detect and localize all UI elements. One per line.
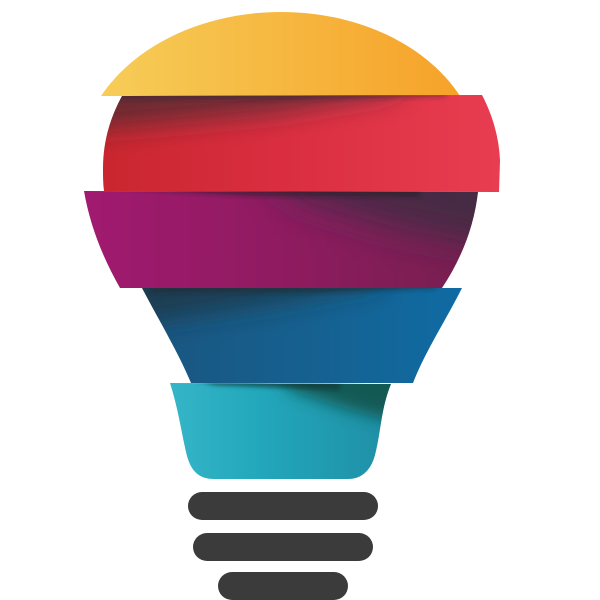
bulb layer: yellow dome	[101, 12, 460, 96]
bulb layer: teal base	[170, 383, 391, 479]
bulb layer: purple band	[84, 191, 478, 288]
red band shadow	[105, 95, 450, 146]
purple band shadow	[130, 191, 478, 261]
thread bar 1	[188, 492, 378, 520]
blue band shadow	[142, 288, 440, 332]
infographic: layered light bulb	[84, 12, 500, 600]
screw thread bars	[188, 492, 378, 600]
bulb layer: blue band	[142, 288, 462, 383]
teal base shadow	[200, 383, 391, 428]
thread bar 3	[218, 572, 348, 600]
bulb layer: red band	[103, 95, 500, 192]
thread bar 2	[193, 533, 373, 561]
